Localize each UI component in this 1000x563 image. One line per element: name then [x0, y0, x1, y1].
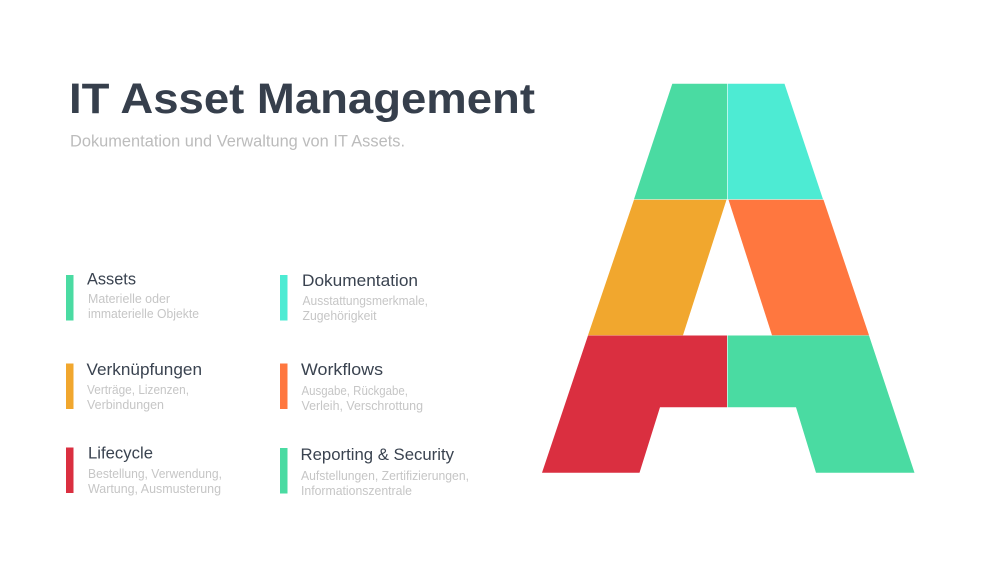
segment: middle right orange [728, 200, 869, 335]
legend item: Dokumentation: Ausstattungsmerkmale, [302, 294, 428, 308]
legend item: Reporting & Security: Reporting & Security [300, 446, 455, 464]
legend item: Assets: Materielle oder [88, 292, 170, 306]
legend item: Lifecycle: Wartung, Ausmusterung [88, 482, 221, 496]
legend item: Workflows [280, 361, 423, 413]
title: IT Asset Management [69, 75, 535, 123]
segment: middle left amber [588, 200, 726, 335]
segment: top right cyan [728, 84, 823, 199]
legend item: Verknüpfungen: Verträge, Lizenzen, [87, 383, 189, 397]
legend item: Assets: immaterielle Objekte [88, 307, 199, 321]
segment: bottom right green [728, 336, 914, 473]
segment: top left green [634, 84, 727, 199]
legend item: Reporting & Security: Aufstellungen, Zertifizierungen, [301, 469, 469, 483]
legend item: Lifecycle: Lifecycle [88, 444, 153, 462]
legend item: Lifecycle: Bestellung, Verwendung, [88, 467, 222, 481]
legend item: Lifecycle [66, 444, 222, 496]
legend item: Assets: Assets [87, 270, 136, 288]
subtitle: Dokumentation und Verwaltung von IT Assets. [70, 132, 405, 150]
legend item: Assets [66, 270, 199, 321]
legend item: Workflows: Ausgabe, Rückgabe, [302, 384, 408, 398]
segment: bottom left red [542, 336, 727, 473]
legend item: Verknüpfungen [66, 361, 202, 412]
legend item: Reporting & Security: Informationszentrale [301, 484, 412, 498]
legend item: Dokumentation [280, 272, 428, 323]
legend item: Workflows: Workflows [301, 361, 383, 379]
legend item: Dokumentation: Dokumentation [302, 272, 418, 290]
legend item: Workflows: Verleih, Verschrottung [302, 399, 423, 413]
legend item: Verknüpfungen: Verknüpfungen [86, 361, 202, 379]
legend item: Reporting & Security [280, 446, 469, 498]
legend item: Dokumentation: Zugehörigkeit [302, 309, 377, 323]
letter A graphic [542, 84, 914, 473]
legend item: Verknüpfungen: Verbindungen [87, 398, 164, 412]
